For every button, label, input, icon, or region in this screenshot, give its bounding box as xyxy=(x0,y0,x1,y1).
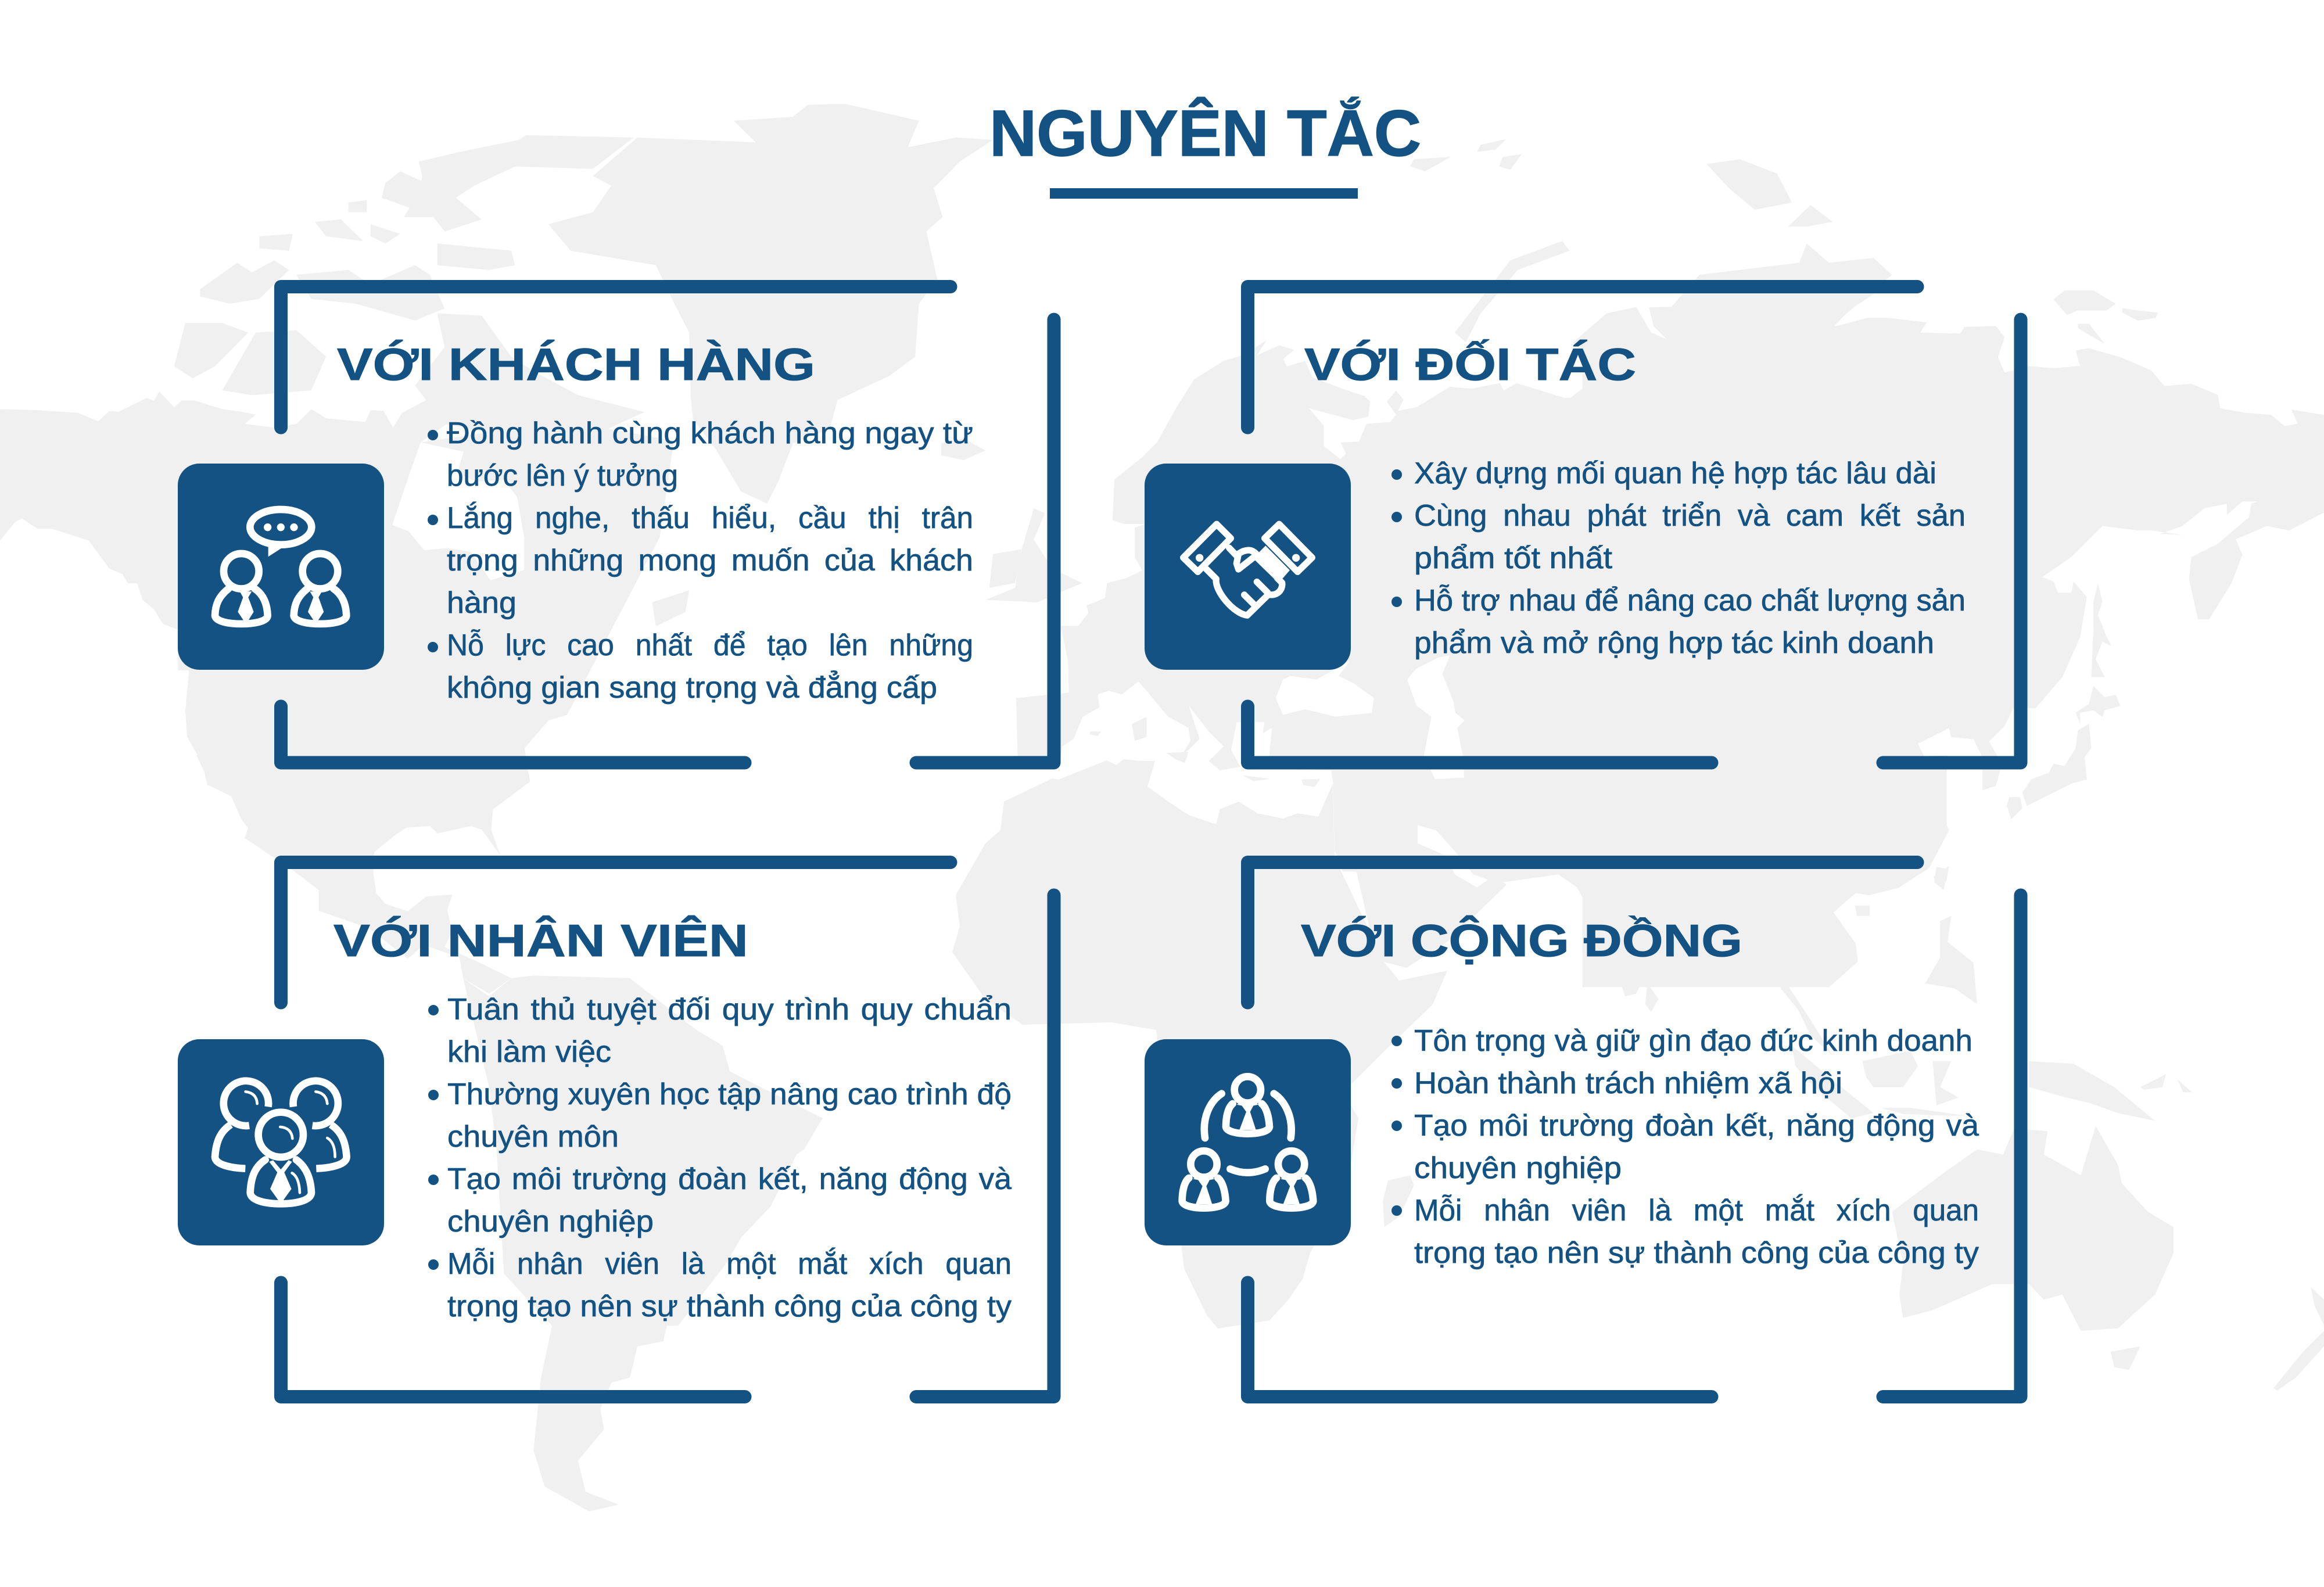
heading: VỚI KHÁCH HÀNG xyxy=(337,339,815,390)
title: NGUYÊN TẮC xyxy=(989,97,1421,170)
icon: two people talking xyxy=(178,464,384,670)
bullet list: phẩm tốt nhất xyxy=(1414,541,1613,575)
bullet list xyxy=(1391,1024,1979,1270)
bullet list: Thường xuyên học tập nâng cao trình độ xyxy=(447,1078,1012,1111)
bullet list: Tuân thủ tuyệt đối quy trình quy chuẩn xyxy=(447,993,1012,1026)
panel: với nhân viên xyxy=(178,862,1054,1396)
bullet list: hàng xyxy=(447,586,517,620)
bullet list: trọng tạo nên sự thành công của công ty xyxy=(447,1290,1012,1323)
bullet list: chuyên nghiệp xyxy=(447,1205,654,1238)
frame xyxy=(281,287,1054,763)
bullet list: Xây dựng mối quan hệ hợp tác lâu dài xyxy=(1414,457,1936,490)
bullet list: không gian sang trọng và đẳng cấp xyxy=(447,670,937,705)
heading: VỚI NHÂN VIÊN xyxy=(333,915,748,966)
bullet list: chuyên nghiệp xyxy=(1414,1151,1622,1185)
bullet list: Mỗi nhân viên là một mắt xích quan xyxy=(1414,1194,1979,1227)
bullet list: Hoàn thành trách nhiệm xã hội xyxy=(1414,1067,1842,1100)
panel: với đối tác xyxy=(1145,287,2021,763)
frame xyxy=(1248,287,2021,763)
bullet list xyxy=(1391,457,1966,660)
panel: với khách hàng xyxy=(178,287,1054,763)
icon: connected community xyxy=(1145,1039,1351,1245)
bullet list xyxy=(428,993,1012,1323)
bullet list: Tôn trọng và giữ gìn đạo đức kinh doanh xyxy=(1414,1024,1972,1058)
heading: VỚI CỘNG ĐỒNG xyxy=(1301,915,1742,966)
bullet list xyxy=(428,417,973,705)
bullet list: trọng những mong muốn của khách xyxy=(447,544,973,577)
bullet list: Tạo môi trường đoàn kết, năng động và xyxy=(447,1162,1012,1196)
bullet list: Mỗi nhân viên là một mắt xích quan xyxy=(447,1247,1012,1281)
panel: với cộng đồng xyxy=(1145,862,2021,1396)
icon: team of three xyxy=(178,1039,384,1245)
bullet list: chuyên môn xyxy=(447,1120,619,1154)
heading: VỚI ĐỐI TÁC xyxy=(1304,339,1636,390)
bullet list: Nỗ lực cao nhất để tạo lên những xyxy=(447,629,973,662)
bullet list: Tạo môi trường đoàn kết, năng động và xyxy=(1414,1109,1979,1143)
bullet list: Cùng nhau phát triển và cam kết sản xyxy=(1414,499,1966,533)
bullet list: phẩm và mở rộng hợp tác kinh doanh xyxy=(1414,626,1934,660)
bullet list: bước lên ý tưởng xyxy=(447,459,678,493)
bullet list: Đồng hành cùng khách hàng ngay từ xyxy=(447,417,973,450)
frame xyxy=(1248,862,2021,1396)
bullet list: Lắng nghe, thấu hiểu, cầu thị trân xyxy=(447,501,973,535)
bullet list: Hỗ trợ nhau để nâng cao chất lượng sản xyxy=(1414,584,1966,617)
icon: handshake xyxy=(1145,464,1351,670)
bullet list: khi làm việc xyxy=(447,1035,611,1069)
bullet list: trọng tạo nên sự thành công của công ty xyxy=(1414,1236,1979,1270)
frame xyxy=(281,862,1054,1396)
